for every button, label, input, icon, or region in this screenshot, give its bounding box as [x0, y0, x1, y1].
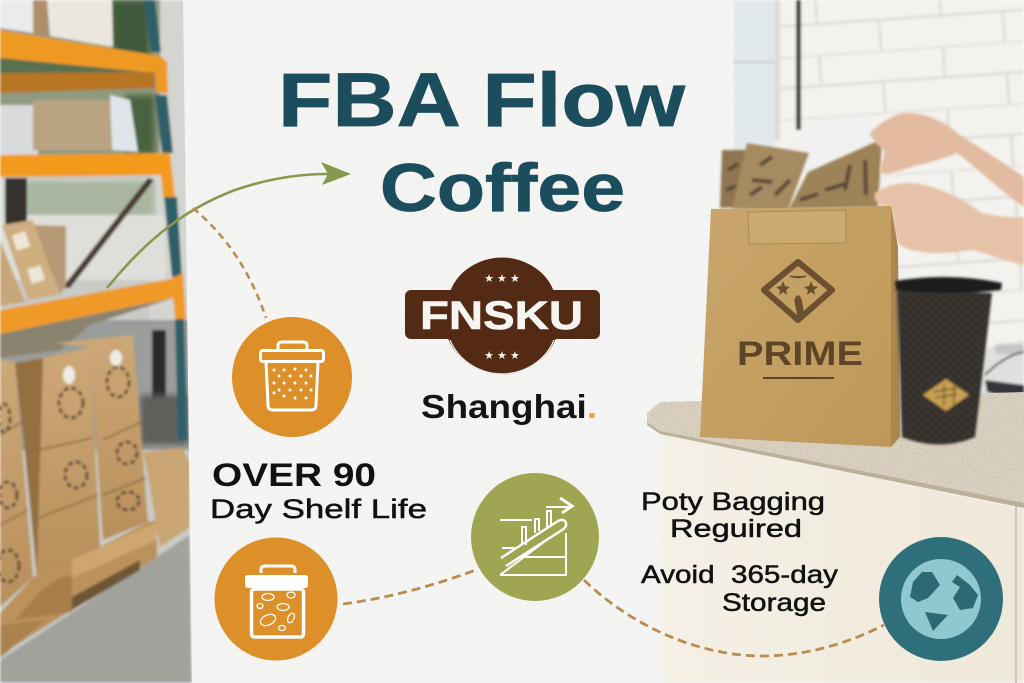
orange shelf beams [0, 30, 168, 94]
wall and counter photo background [733, 0, 1024, 440]
stacked cartons [55, 335, 148, 540]
FNSKU badge: ★ ★ ★ [484, 350, 520, 362]
upper hand [870, 113, 1024, 207]
dashed connector: olive to teal [584, 580, 884, 656]
paper panel [183, 0, 733, 683]
FNSKU badge: ★ ★ ★ [484, 273, 520, 285]
black cup [895, 277, 1002, 444]
coffee packets [720, 139, 882, 210]
counter and cabinet [647, 392, 1024, 683]
requirement text: Reguired [670, 515, 802, 543]
warehouse photo background [0, 0, 192, 683]
bag diamond logo [764, 262, 832, 320]
bag flap [748, 210, 846, 244]
bag wordmark: PRIME [737, 335, 863, 373]
icon: teal globe [879, 537, 1003, 661]
teal shelf posts [144, 0, 188, 440]
pallet [0, 520, 157, 655]
title [278, 58, 686, 226]
dashed connector: top orange circle [193, 208, 266, 318]
location label: Shanghai . [421, 388, 597, 425]
top shelf boxes [0, 0, 33, 33]
requirement text: Avoid 365-day [641, 561, 839, 589]
curved green arrow [107, 162, 351, 288]
requirement text [641, 488, 839, 617]
photo: hands, coffee packets and PRIME bag [700, 113, 1024, 447]
icon: olive growth chart [471, 473, 599, 601]
lower hand [874, 183, 1024, 265]
requirement text: Storage [722, 589, 826, 617]
shelf life text: Day Shelf Life [210, 494, 427, 524]
title: Coffee [380, 150, 625, 226]
floor [0, 535, 192, 683]
icon: bin with coffee beans [214, 538, 338, 660]
middle shelf box [0, 105, 38, 155]
requirement text: Poty Bagging [641, 488, 825, 516]
title: FBA Flow [278, 58, 686, 143]
icon: bin with dots [232, 317, 352, 437]
FNSKU badge [405, 256, 600, 374]
dashed connector: lower orange to olive [343, 570, 476, 604]
shelf life text [210, 457, 427, 524]
shelf life text: OVER 90 [212, 457, 376, 493]
lower shelf boxes [33, 225, 66, 295]
FNSKU badge: FNSKU [420, 294, 583, 338]
PRIME bag [700, 206, 900, 447]
